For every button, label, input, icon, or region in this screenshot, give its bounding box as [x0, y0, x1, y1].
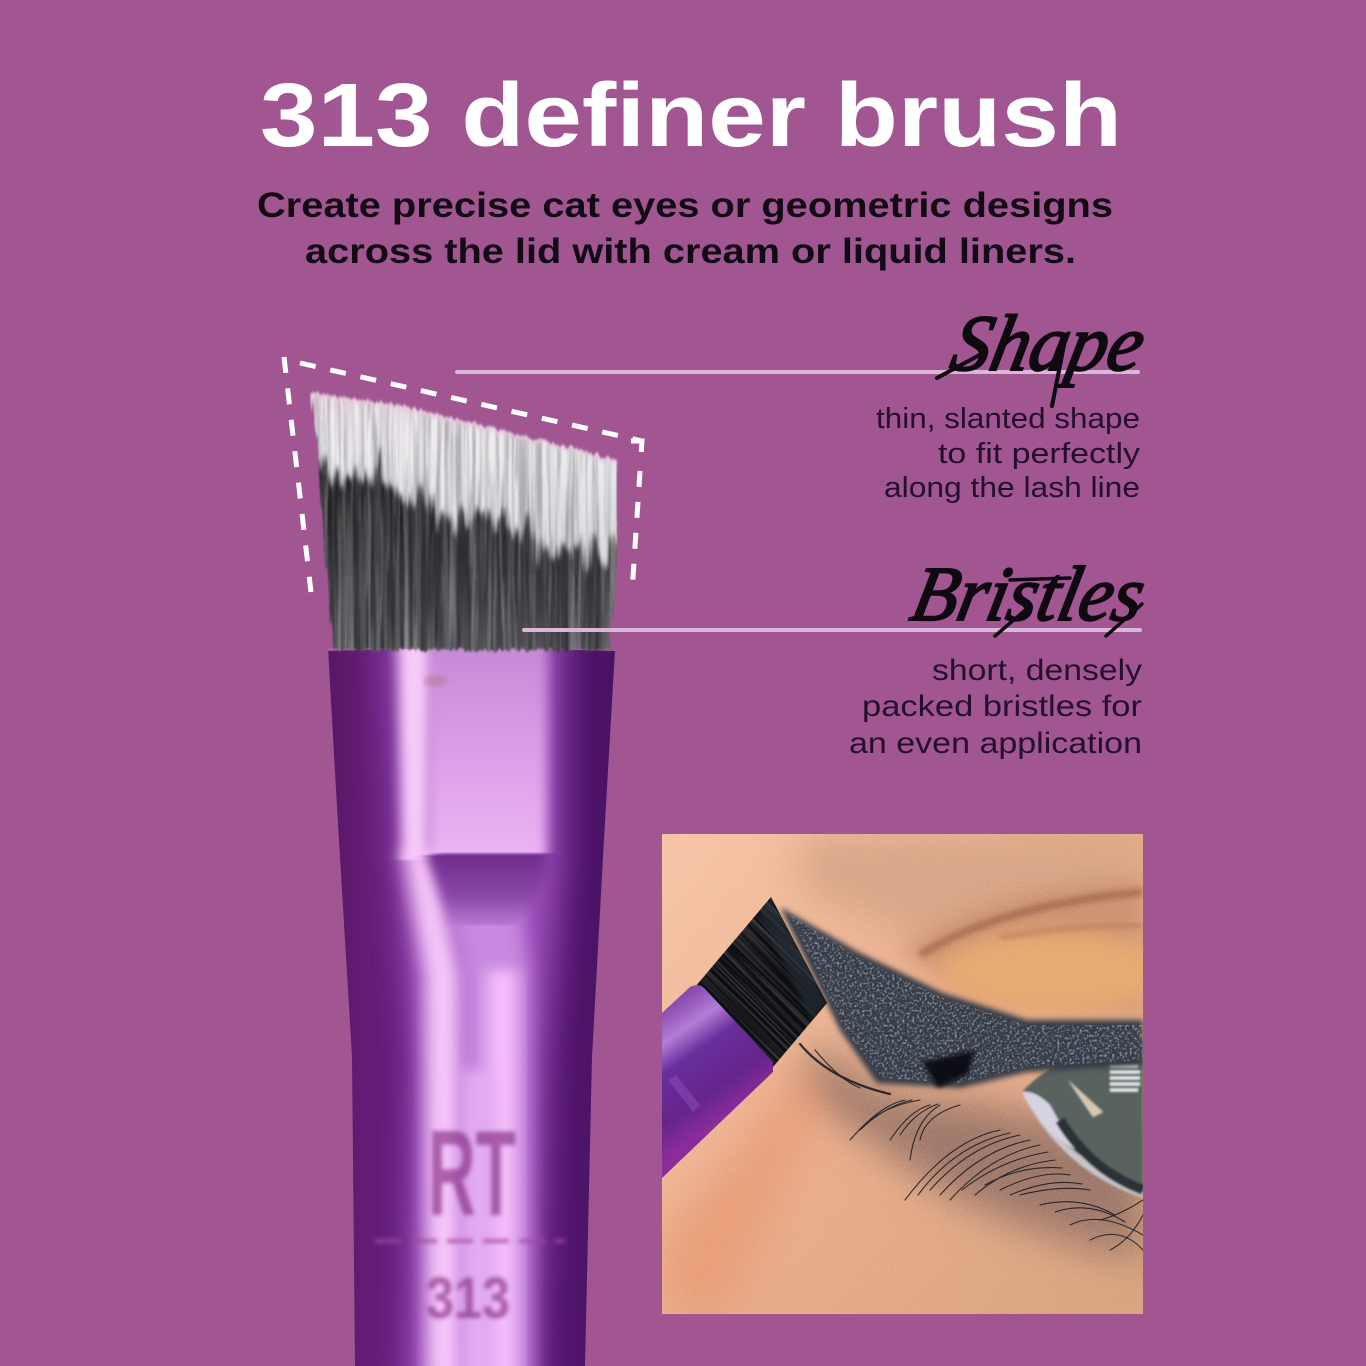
subtitle: across the lid with cream or liquid liners.	[305, 232, 1076, 271]
handle engraving: RT logo and number	[375, 1105, 565, 1331]
handle engraving: RT logo and number: RT	[428, 1105, 516, 1241]
leader line: bristles	[522, 628, 1142, 632]
skin	[662, 834, 1170, 1314]
dashed slant outline	[284, 357, 642, 592]
brush handle	[320, 630, 620, 1366]
text: bristles description	[849, 654, 1142, 760]
heading: Shape: Shape	[944, 300, 1153, 388]
text: shape description: thin, slanted shape	[876, 403, 1140, 435]
eye	[1022, 1040, 1143, 1198]
brush in photo	[662, 897, 827, 1178]
title: 313 definer brush	[260, 66, 1122, 166]
text: bristles description: packed bristles for	[862, 690, 1142, 723]
handle engraving: RT logo and number: 313	[426, 1266, 510, 1331]
text: shape description	[876, 403, 1141, 504]
text: bristles description: an even application	[849, 727, 1142, 760]
text: shape description: along the lash line	[884, 472, 1140, 504]
callout: shape	[455, 300, 1153, 504]
heading: Bristles: Bristles	[904, 552, 1153, 638]
lashes	[800, 1044, 1143, 1250]
subtitle: Create precise cat eyes or geometric designs	[257, 186, 1113, 225]
photo: brush applying eyeliner	[662, 834, 1143, 1314]
callout: bristles	[522, 552, 1153, 760]
eyeliner	[780, 900, 1143, 1090]
brush illustration	[280, 350, 650, 1366]
text: shape description: to fit perfectly	[938, 438, 1141, 470]
leader line: shape	[455, 370, 1140, 374]
bristles	[310, 390, 618, 654]
text: bristles description: short, densely	[932, 654, 1142, 687]
subtitle	[257, 186, 1113, 271]
